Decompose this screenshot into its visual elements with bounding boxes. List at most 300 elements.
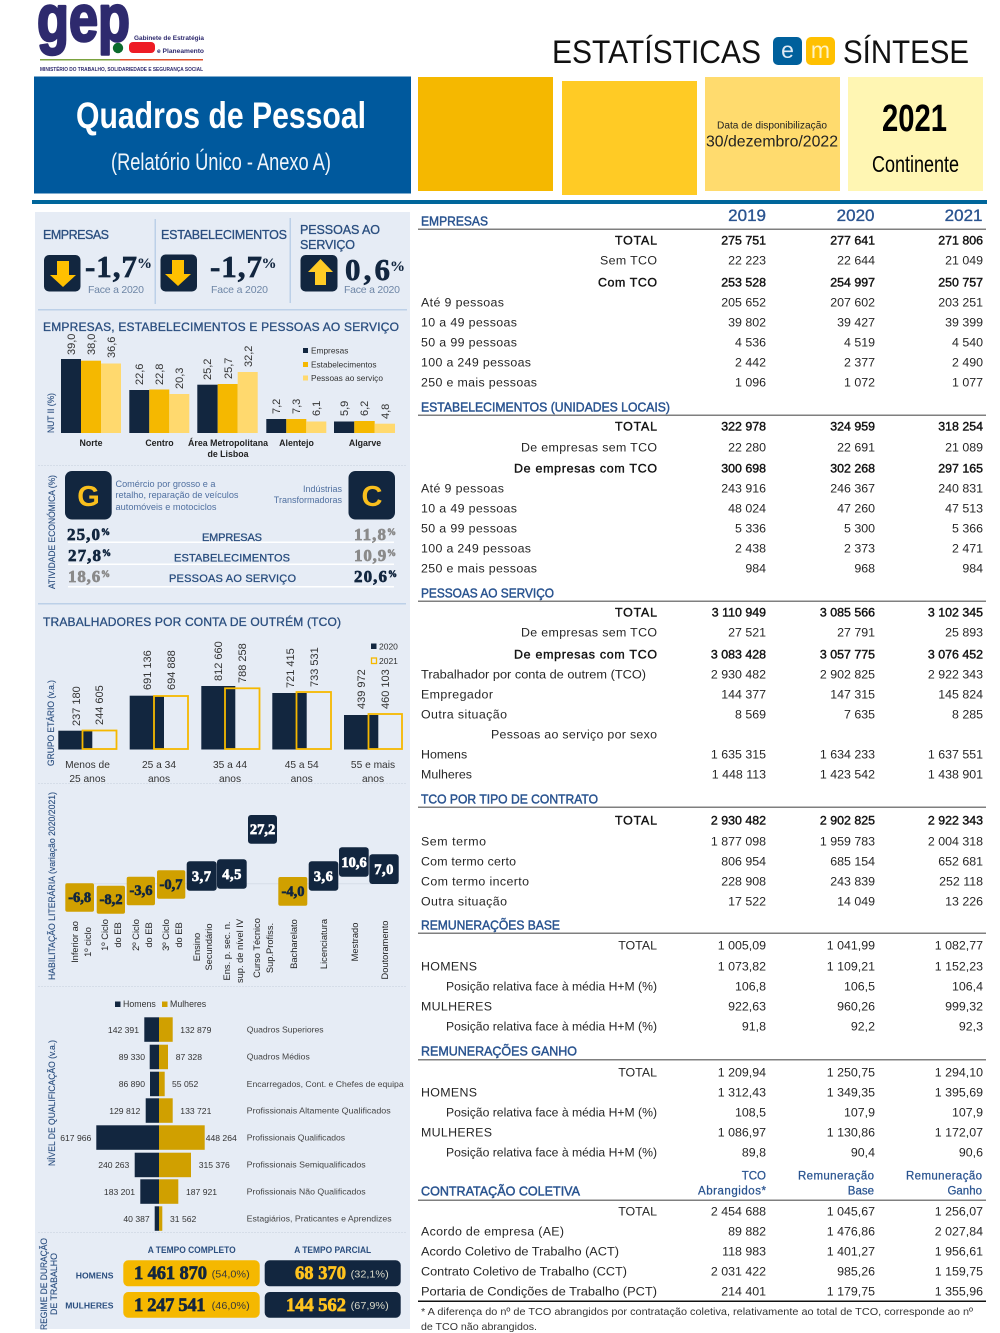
rows: Posição relativa face à média H+M (%) <box>446 1145 657 1159</box>
rows: 240 831 <box>938 481 983 495</box>
rows: 27 521 <box>728 625 766 639</box>
value labels: 129 812 <box>109 1106 141 1116</box>
KPI: pessoas ao serviço: PESSOAS AO <box>300 223 380 237</box>
axis label: regime de duração <box>39 1238 60 1330</box>
KPI: estabelecimentos: -1,7 <box>210 249 262 284</box>
value labels: 40 387 <box>123 1214 150 1224</box>
rows: 21 049 <box>945 253 983 267</box>
value labels: 133 721 <box>180 1106 212 1116</box>
value labels: 7,2 <box>271 399 283 414</box>
value labels: 617 966 <box>60 1133 92 1143</box>
bars: Norte <box>61 359 121 433</box>
rows: 1 250,75 <box>827 1065 875 1079</box>
rows: 806 954 <box>721 854 766 868</box>
heading: Estatísticas em Síntese: SÍNTESE <box>843 34 969 70</box>
section heading: TCO POR TIPO DE CONTRATO <box>421 791 598 806</box>
tile values <box>68 822 394 908</box>
rows: 1 045,67 <box>827 1204 875 1218</box>
rows: 4 540 <box>952 335 983 349</box>
section heading: EMPRESAS <box>421 213 488 228</box>
section heading: REMUNERAÇÕES GANHO <box>421 1043 577 1058</box>
row: estabelecimentos: 27,8 <box>68 546 101 565</box>
rows: TOTAL <box>615 813 657 827</box>
KPI: empresas <box>43 228 152 296</box>
tile values: 27,2 <box>250 822 275 838</box>
rows: 922,63 <box>728 999 766 1013</box>
logo: GEP: e Planeamento <box>157 48 204 55</box>
bars: Centro <box>129 390 189 433</box>
section heading: ESTABELECIMENTOS (UNIDADES LOCAIS) <box>421 399 670 414</box>
bar chart: NUT II <box>46 334 395 459</box>
panel: headline KPIs <box>38 218 407 310</box>
value labels: 55 052 <box>172 1079 199 1089</box>
table: year headers: 2019 <box>728 206 766 225</box>
tile values: 10,6 <box>341 855 367 871</box>
value labels: 22,8 <box>154 364 166 385</box>
age labels: anos <box>148 774 170 785</box>
rows: 1 109,21 <box>827 959 875 973</box>
legend <box>371 642 398 666</box>
rows: 144 377 <box>721 687 766 701</box>
rows: 652 681 <box>938 854 983 868</box>
panel: atividade económica <box>47 471 397 589</box>
separator <box>38 603 406 604</box>
rows: 1 355,96 <box>935 1284 983 1298</box>
rows: 5 366 <box>952 521 983 535</box>
value labels: 4,8 <box>380 404 392 419</box>
category labels: 1º ciclo <box>83 927 93 957</box>
rows: Até 9 pessoas <box>421 295 504 309</box>
region labels: de Lisboa <box>207 449 249 459</box>
footnote <box>421 1307 973 1333</box>
footnote: * A diferença do nº de TCO abrangidos por contratação coletiva, relativamente ao total de TCO, corresponde ao nº <box>421 1307 973 1318</box>
table section: pessoas ao serviço <box>418 585 986 781</box>
rows: 91,8 <box>742 1019 766 1033</box>
column headers <box>698 1170 982 1197</box>
rows: 2 902 825 <box>820 667 875 681</box>
value labels: 694 888 <box>166 650 178 690</box>
rows: 2 922 343 <box>928 813 983 827</box>
rows: 275 751 <box>721 233 766 247</box>
rows: 3 102 345 <box>928 605 983 619</box>
rows: Posição relativa face à média H+M (%) <box>446 1019 657 1033</box>
KPI: estabelecimentos: Face a 2020 <box>211 284 268 296</box>
axis label: atividade económica: ATIVIDADE ECONÓMICA (%) <box>47 475 58 589</box>
value labels: 691 136 <box>142 650 154 690</box>
row: empresas: 25,0 <box>67 525 100 544</box>
rows: 1 877 098 <box>711 834 766 848</box>
column headers: Ganho <box>947 1185 982 1197</box>
row: pessoas ao serviço: % <box>388 569 397 579</box>
column headers: A TEMPO COMPLETO <box>148 1245 236 1255</box>
category labels: 1º Ciclo <box>100 919 110 951</box>
tile: mulheres tempo parcial: (67,9%) <box>351 1300 389 1312</box>
rows: 92,3 <box>959 1019 983 1033</box>
rows: 89,8 <box>742 1145 766 1159</box>
legend: Homens <box>123 999 156 1009</box>
row labels: MULHERES <box>65 1300 114 1310</box>
category labels: Encarregados, Cont. e Chefes de equipa <box>247 1079 404 1089</box>
value labels: 89 330 <box>119 1052 145 1062</box>
rows: 960,26 <box>837 999 875 1013</box>
rows: 300 698 <box>721 461 766 475</box>
tile: mulheres tempo parcial <box>265 1292 401 1318</box>
rows: Posição relativa face à média H+M (%) <box>446 979 657 993</box>
rows: 203 251 <box>938 295 983 309</box>
rows: 90,4 <box>851 1145 875 1159</box>
rows: 2 027,84 <box>935 1224 983 1238</box>
rows: 5 336 <box>735 521 766 535</box>
icon: section C: C <box>362 481 383 513</box>
category labels: do EB <box>174 922 184 948</box>
category labels: Profissionais Semiqualificados <box>247 1160 366 1170</box>
rows: 39 399 <box>945 315 983 329</box>
rows <box>421 938 983 1033</box>
row labels: HOMENS <box>76 1270 114 1280</box>
category labels <box>247 1024 404 1224</box>
rows: 7 635 <box>844 707 875 721</box>
value labels: 132 879 <box>180 1025 212 1035</box>
footnote: de TCO não abrangidos. <box>421 1322 537 1333</box>
category labels: 3º Ciclo <box>161 919 171 951</box>
rows: Com termo certo <box>421 854 516 868</box>
rows: MULHERES <box>421 1125 492 1139</box>
table section: TCO por tipo de contrato <box>418 791 986 908</box>
value labels: 87 328 <box>176 1052 202 1062</box>
value labels: 39,0 <box>66 334 78 355</box>
rows: Com TCO <box>598 275 657 289</box>
tile: homens tempo parcial: (32,1%) <box>351 1268 389 1280</box>
bars: outlined 2021 <box>82 688 402 749</box>
rows: 3 110 949 <box>712 605 766 619</box>
rows: 246 367 <box>830 481 875 495</box>
rows: 2 373 <box>844 541 875 555</box>
title panel: Quadros de Pessoal: Quadros de Pessoal <box>76 95 366 136</box>
rows: 1 152,23 <box>935 959 983 973</box>
age labels: 45 a 54 <box>285 760 319 771</box>
heading: Estatísticas em Síntese: e <box>781 37 794 63</box>
rows: Outra situação <box>421 707 507 721</box>
rows: 22 691 <box>837 440 875 454</box>
rows: Acordo Coletivo de Trabalho (ACT) <box>421 1244 619 1258</box>
rows: 984 <box>745 561 766 575</box>
rows: 985,26 <box>837 1264 875 1278</box>
rows: 8 569 <box>735 707 766 721</box>
icon: section C <box>348 471 395 520</box>
text: section G description: retalho, reparação de veículos <box>116 490 239 500</box>
value labels: 240 263 <box>98 1160 130 1170</box>
tile values: 3,6 <box>314 869 333 885</box>
rows <box>421 233 983 389</box>
rows: HOMENS <box>421 1085 477 1099</box>
region labels: Centro <box>145 438 174 448</box>
rows: 1 312,43 <box>718 1085 766 1099</box>
KPI: empresas: EMPRESAS <box>43 228 109 242</box>
rows: 302 268 <box>830 461 875 475</box>
legend: 2020 <box>379 642 398 652</box>
row: estabelecimentos: % <box>102 548 111 558</box>
rows: 2 454 688 <box>711 1204 766 1218</box>
rows: 10 a 49 pessoas <box>421 315 517 329</box>
tile values: -0,7 <box>160 877 182 893</box>
rows: 1 956,61 <box>935 1244 983 1258</box>
heading: Estatísticas em Síntese: ESTATÍSTICAS <box>552 34 761 70</box>
tile: homens tempo completo: (54,0%) <box>212 1268 250 1280</box>
bars: Área Metropolitana de Lisboa <box>197 372 258 433</box>
table: year headers <box>728 206 982 225</box>
rows: 21 089 <box>945 440 983 454</box>
category labels: Quadros Superiores <box>247 1024 324 1034</box>
panel: availability date: 30/dezembro/2022 <box>706 134 838 150</box>
panel: availability date <box>705 77 840 191</box>
region labels: Área Metropolitana <box>188 438 268 448</box>
rows: 2 902 825 <box>820 813 875 827</box>
tile: mulheres tempo completo: 1 247 541 <box>134 1296 206 1316</box>
rows: 253 528 <box>721 275 766 289</box>
decorative yellow block 1 <box>418 77 553 191</box>
value labels <box>71 641 392 726</box>
row: pessoas ao serviço: % <box>101 569 110 579</box>
dotted separator <box>38 1232 406 1234</box>
category labels: Profissionais Qualificados <box>247 1132 345 1142</box>
rows: 47 513 <box>945 501 983 515</box>
logo: GEP: MINISTÉRIO DO TRABALHO, SOLIDARIEDADE E SEGURANÇA SOCIAL <box>40 65 204 73</box>
rows: 17 522 <box>728 894 766 908</box>
age labels: Menos de <box>65 760 110 771</box>
value labels: 36,6 <box>106 337 118 358</box>
tile values: -3,6 <box>130 883 152 899</box>
text: section G description: automóveis e motociclos <box>116 502 217 512</box>
value labels: 22,6 <box>134 364 146 385</box>
rows: 228 908 <box>721 874 766 888</box>
rows: 1 096 <box>735 375 766 389</box>
section heading: CONTRATAÇÃO COLETIVA <box>421 1183 580 1198</box>
category labels: do EB <box>144 922 154 948</box>
rows: Contrato Coletivo de Trabalho (CCT) <box>421 1264 627 1278</box>
rows: 205 652 <box>721 295 766 309</box>
rows: 89 882 <box>728 1224 766 1238</box>
rows: 106,4 <box>952 979 983 993</box>
column headers: Abrangidos* <box>698 1185 767 1197</box>
rows: TOTAL <box>615 605 657 619</box>
value labels: 439 972 <box>356 669 368 709</box>
rows: 1 086,97 <box>718 1125 766 1139</box>
panel: year and territory: Continente <box>872 151 959 177</box>
bar chart: grupo etário <box>46 641 402 785</box>
legend: Mulheres <box>170 999 207 1009</box>
legend: 2021 <box>379 656 398 666</box>
value labels: 812 660 <box>213 641 225 681</box>
category labels: Doutoramento <box>380 921 390 979</box>
tile: homens tempo completo <box>123 1260 260 1286</box>
rows: 3 085 566 <box>820 605 875 619</box>
row: empresas: EMPRESAS <box>202 532 262 544</box>
value labels <box>66 334 392 419</box>
chart: habilitação literária <box>47 792 399 983</box>
value labels: 25,2 <box>202 359 214 380</box>
decorative yellow block 2 <box>562 81 697 195</box>
value labels: 244 605 <box>94 685 106 725</box>
rows: 92,2 <box>851 1019 875 1033</box>
category labels <box>70 918 390 983</box>
rows: De empresas com TCO <box>514 461 657 475</box>
rows: 1 072 <box>844 375 875 389</box>
KPI: estabelecimentos: % <box>262 256 276 272</box>
heading: Estatísticas em Síntese <box>552 34 969 70</box>
rows: 47 260 <box>837 501 875 515</box>
column headers: Base <box>848 1185 874 1197</box>
row: estabelecimentos <box>68 546 396 565</box>
tile values: 4,5 <box>222 867 242 883</box>
rows: 2 930 482 <box>711 667 766 681</box>
rows: 1 256,07 <box>935 1204 983 1218</box>
tile: mulheres tempo completo: (46,0%) <box>212 1300 250 1312</box>
rows: 1 438 901 <box>928 767 983 781</box>
region labels: Algarve <box>349 438 381 448</box>
rows: 90,6 <box>959 1145 983 1159</box>
rows: 243 839 <box>830 874 875 888</box>
value labels: 788 258 <box>237 643 249 683</box>
title panel: Quadros de Pessoal: (Relatório Único - Anexo A) <box>111 149 331 176</box>
row labels <box>65 1270 114 1310</box>
rows: Homens <box>421 747 467 761</box>
rows: 48 024 <box>728 501 766 515</box>
column headers: Remuneração <box>906 1170 982 1182</box>
rows: 147 315 <box>830 687 875 701</box>
rows: 2 031 422 <box>711 1264 766 1278</box>
chart: nível de qualificação <box>47 999 404 1231</box>
rows: 1 635 315 <box>711 747 766 761</box>
category labels: Licenciatura <box>319 918 329 969</box>
rows: TOTAL <box>618 938 657 952</box>
tile values: 7,0 <box>374 862 394 878</box>
rows: TOTAL <box>618 1065 657 1079</box>
row: pessoas ao serviço: 20,6 <box>354 567 387 586</box>
rows: 2 930 482 <box>711 813 766 827</box>
value labels: 733 531 <box>309 647 321 687</box>
KPI: pessoas ao serviço <box>300 223 405 296</box>
row: empresas: 11,8 <box>354 525 386 544</box>
rows: Trabalhador por conta de outrem (TCO) <box>421 667 646 681</box>
rows: 2 377 <box>844 355 875 369</box>
rows: 10 a 49 pessoas <box>421 501 517 515</box>
rows: 254 997 <box>830 275 875 289</box>
age labels: anos <box>362 774 384 785</box>
rows <box>421 605 983 781</box>
bars: Algarve <box>334 421 395 433</box>
rows: Outra situação <box>421 894 507 908</box>
tile values: -8,2 <box>100 892 122 908</box>
tile: mulheres tempo parcial: 144 562 <box>286 1296 346 1316</box>
value labels: 315 376 <box>199 1160 230 1170</box>
row: estabelecimentos: ESTABELECIMENTOS <box>174 552 290 564</box>
legend: Pessoas ao serviço <box>311 373 383 383</box>
rows: 1 159,75 <box>935 1264 983 1278</box>
heading: trabalhadores por conta de outrem: TRABALHADORES POR CONTA DE OUTRÉM (TCO) <box>43 614 341 629</box>
category labels: Secundário <box>204 923 214 971</box>
rows <box>421 1204 983 1298</box>
table section: remunerações ganho <box>418 1043 986 1159</box>
axis label: habilitação literária: HABILITAÇÃO LITERÁRIA (variação 2020/2021) <box>47 792 58 980</box>
rows: 39 427 <box>837 315 875 329</box>
panel: regime de duração de trabalho <box>39 1238 401 1330</box>
rows: TOTAL <box>618 1204 657 1218</box>
tile: mulheres tempo completo <box>123 1292 260 1318</box>
category labels: Bacharelato <box>289 919 299 969</box>
legend <box>115 999 207 1009</box>
rows: 25 893 <box>945 625 983 639</box>
rows: 2 922 343 <box>928 667 983 681</box>
rows: TOTAL <box>615 419 657 433</box>
rows: 1 423 542 <box>820 767 875 781</box>
rows: 277 641 <box>830 233 875 247</box>
value labels: 86 890 <box>119 1079 145 1089</box>
value labels: 32,2 <box>243 346 255 367</box>
age labels <box>65 760 395 785</box>
rows: 22 223 <box>728 253 766 267</box>
tiles: negative variation <box>65 870 307 914</box>
rows: 118 983 <box>722 1244 766 1258</box>
rows: 1 073,82 <box>718 959 766 973</box>
rows: Com termo incerto <box>421 874 529 888</box>
rows: 324 959 <box>830 419 875 433</box>
rows: 4 536 <box>735 335 766 349</box>
rows: 145 824 <box>938 687 983 701</box>
rows: 1 005,09 <box>718 938 766 952</box>
category labels: 2º Ciclo <box>131 919 141 951</box>
rows: Mulheres <box>421 767 472 781</box>
row: empresas: % <box>101 527 110 537</box>
region labels: Alentejo <box>279 438 314 448</box>
rows: 214 401 <box>721 1284 766 1298</box>
rows: MULHERES <box>421 999 492 1013</box>
rows: HOMENS <box>421 959 477 973</box>
KPI: estabelecimentos <box>160 228 287 296</box>
rows: 4 519 <box>844 335 875 349</box>
axis label: NUT II: NUT II (%) <box>46 393 57 433</box>
rows: 1 476,86 <box>827 1224 875 1238</box>
text: section C description: Indústrias <box>303 484 342 494</box>
value labels: 448 264 <box>206 1133 237 1143</box>
rows: 685 154 <box>830 854 875 868</box>
KPI: empresas: Face a 2020 <box>88 284 144 296</box>
dotted separator <box>38 782 406 784</box>
value labels: 25,7 <box>223 358 235 379</box>
table section: empresas <box>418 213 986 389</box>
icon: section G <box>65 471 112 520</box>
KPI: empresas: -1,7 <box>85 249 137 284</box>
tile values: -6,8 <box>68 890 91 906</box>
row: empresas <box>67 525 396 544</box>
dotted separator <box>38 986 406 988</box>
category labels: Quadros Médios <box>247 1052 310 1062</box>
rows: 968 <box>854 561 875 575</box>
bars: Alentejo <box>266 419 326 433</box>
rows: Até 9 pessoas <box>421 481 504 495</box>
rows: 5 300 <box>844 521 875 535</box>
rows: 207 602 <box>830 295 875 309</box>
rows: 1 294,10 <box>935 1065 983 1079</box>
rows: 250 757 <box>938 275 983 289</box>
axis label: regime de duração: DE TRABALHO <box>49 1253 60 1315</box>
rows <box>421 1065 983 1159</box>
title panel: Quadros de Pessoal <box>34 76 411 194</box>
rows: 27 791 <box>837 625 875 639</box>
KPI: pessoas ao serviço: Face a 2020 <box>344 284 400 296</box>
table: year headers: 2021 <box>945 206 982 225</box>
rows: 1 401,27 <box>827 1244 875 1258</box>
value labels: 183 201 <box>104 1187 135 1197</box>
